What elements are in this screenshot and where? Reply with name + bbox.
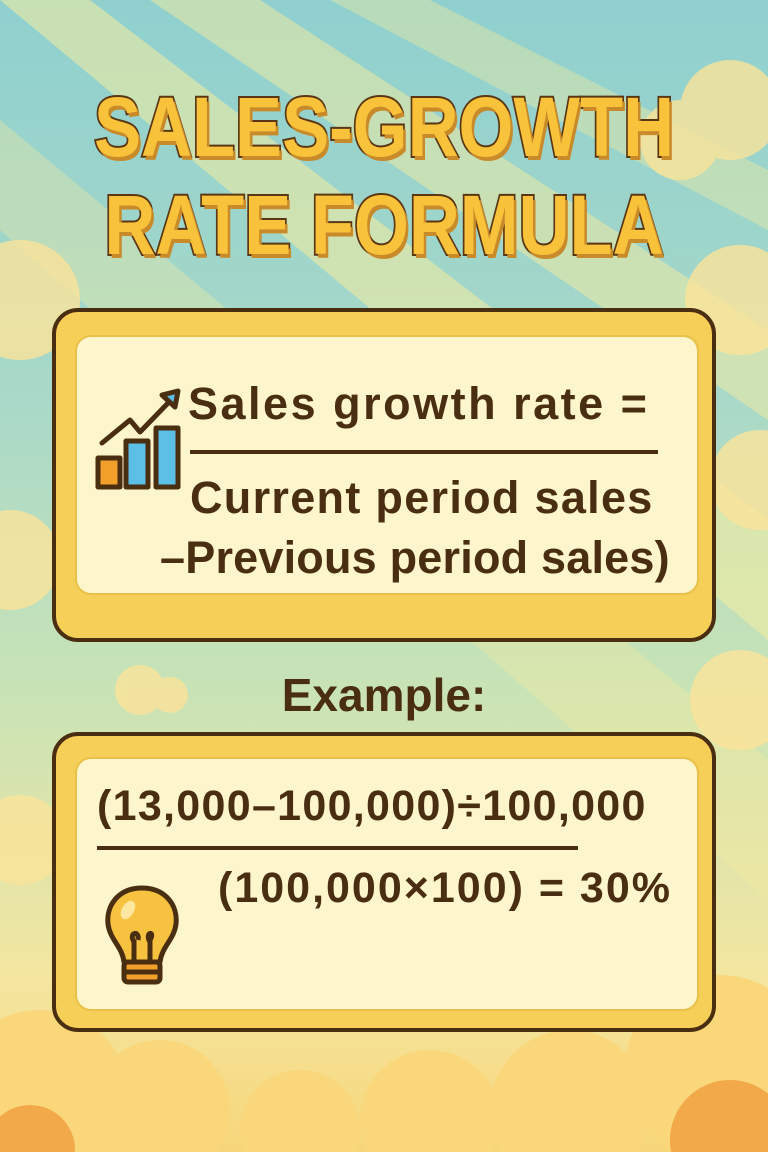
divider line xyxy=(190,450,658,454)
icon: bar chart xyxy=(96,388,180,490)
title: SALES-GROWTH xyxy=(94,80,674,174)
text: example numerator: (13,000–100,000)÷100,000 xyxy=(97,782,647,830)
heading: example: Example: xyxy=(282,669,486,721)
text: example result: (100,000×100) = 30% xyxy=(218,864,672,912)
title: RATE FORMULA xyxy=(104,178,664,272)
icon: light bulb xyxy=(105,886,179,984)
text: formula denominator: Current period sales xyxy=(190,472,654,523)
panel: formula xyxy=(52,308,716,642)
title xyxy=(94,80,674,272)
panel: example xyxy=(52,732,716,1032)
text: formula numerator: Sales growth rate = xyxy=(188,378,649,429)
text: –Previous period sales) xyxy=(160,532,670,583)
